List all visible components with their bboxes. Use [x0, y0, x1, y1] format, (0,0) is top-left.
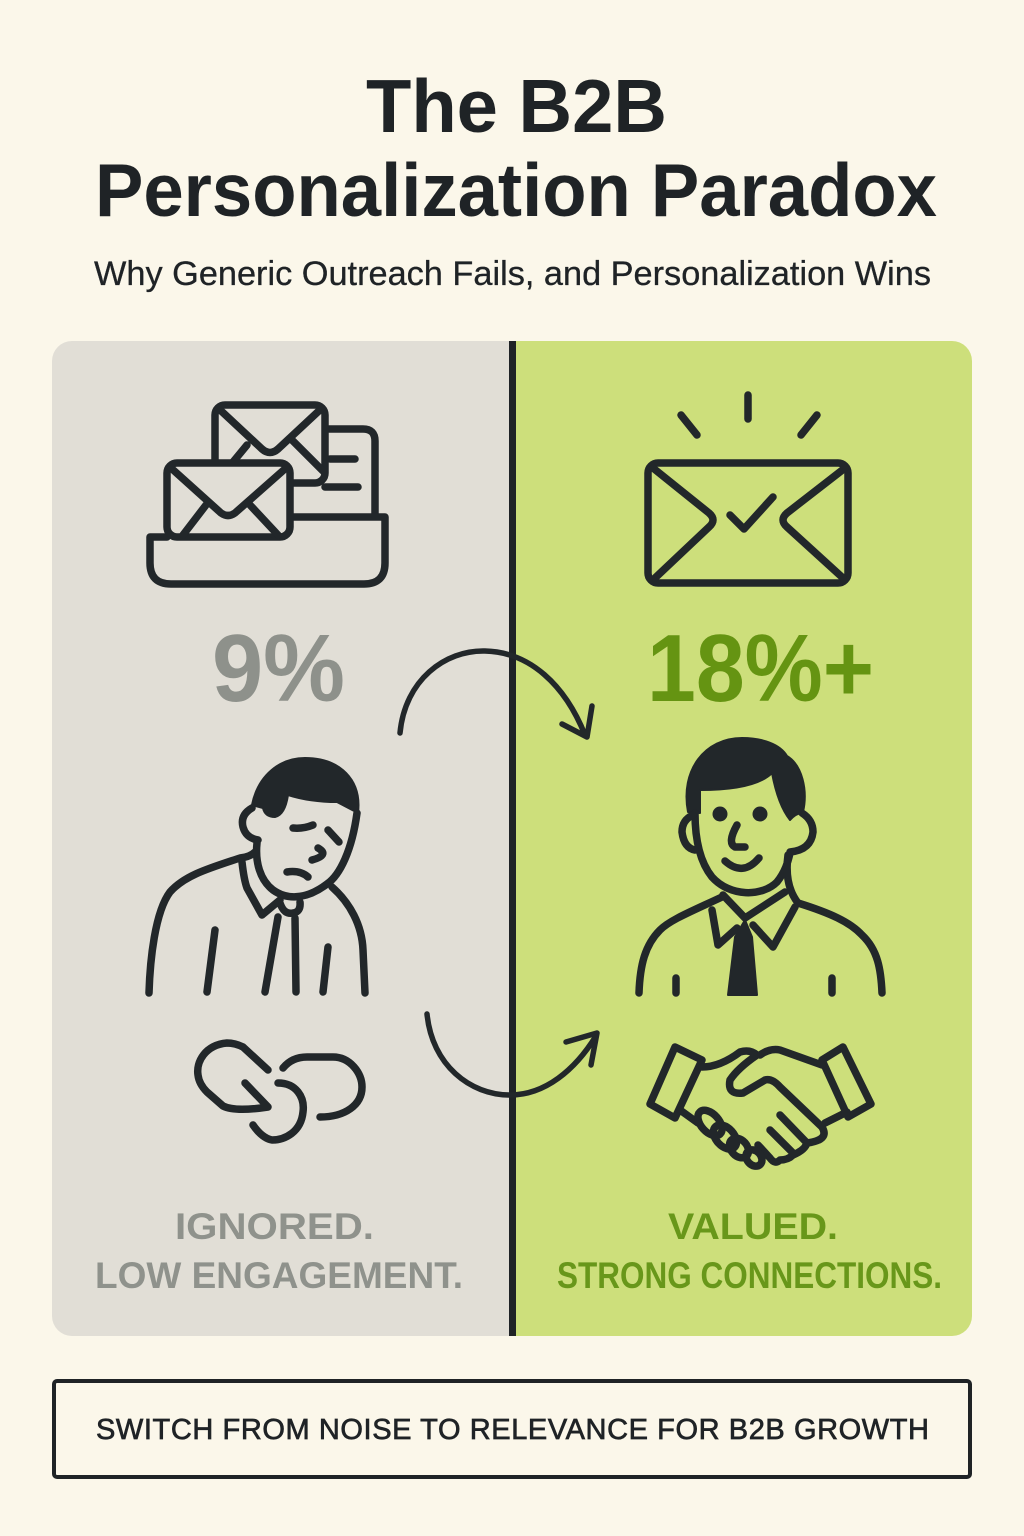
caption: valued: STRONG CONNECTIONS.: [557, 1255, 942, 1296]
arrow: top: [400, 651, 592, 737]
icon: crowded inbox: [150, 405, 385, 584]
callout box: [54, 1381, 970, 1477]
title: The B2B: [366, 64, 667, 148]
subtitle: Why Generic Outreach Fails, and Personalization Wins: [94, 255, 931, 293]
title: [95, 64, 937, 232]
icon: handshake: [650, 1047, 871, 1169]
callout box: SWITCH FROM NOISE TO RELEVANCE FOR B2B GROWTH: [96, 1414, 929, 1446]
caption: valued: VALUED.: [668, 1206, 838, 1247]
icon: happy man: [639, 738, 882, 995]
caption: ignored: LOW ENGAGEMENT.: [95, 1255, 463, 1296]
icon: broken chain: [198, 1043, 362, 1140]
panel: personalization: [512, 341, 972, 1336]
statistic: 9%: 9%: [212, 615, 345, 722]
divider: [509, 341, 516, 1336]
title: Personalization Paradox: [95, 148, 937, 232]
icon: disengaged man: [149, 758, 365, 993]
arrow: bottom: [427, 1014, 597, 1095]
caption: valued: [557, 1206, 942, 1296]
panel: generic outreach: [52, 341, 512, 1336]
caption: ignored: [95, 1206, 463, 1296]
caption: ignored: IGNORED.: [175, 1206, 374, 1247]
statistic: 18%+: 18%+: [647, 615, 874, 722]
icon: notified envelope: [648, 395, 848, 583]
